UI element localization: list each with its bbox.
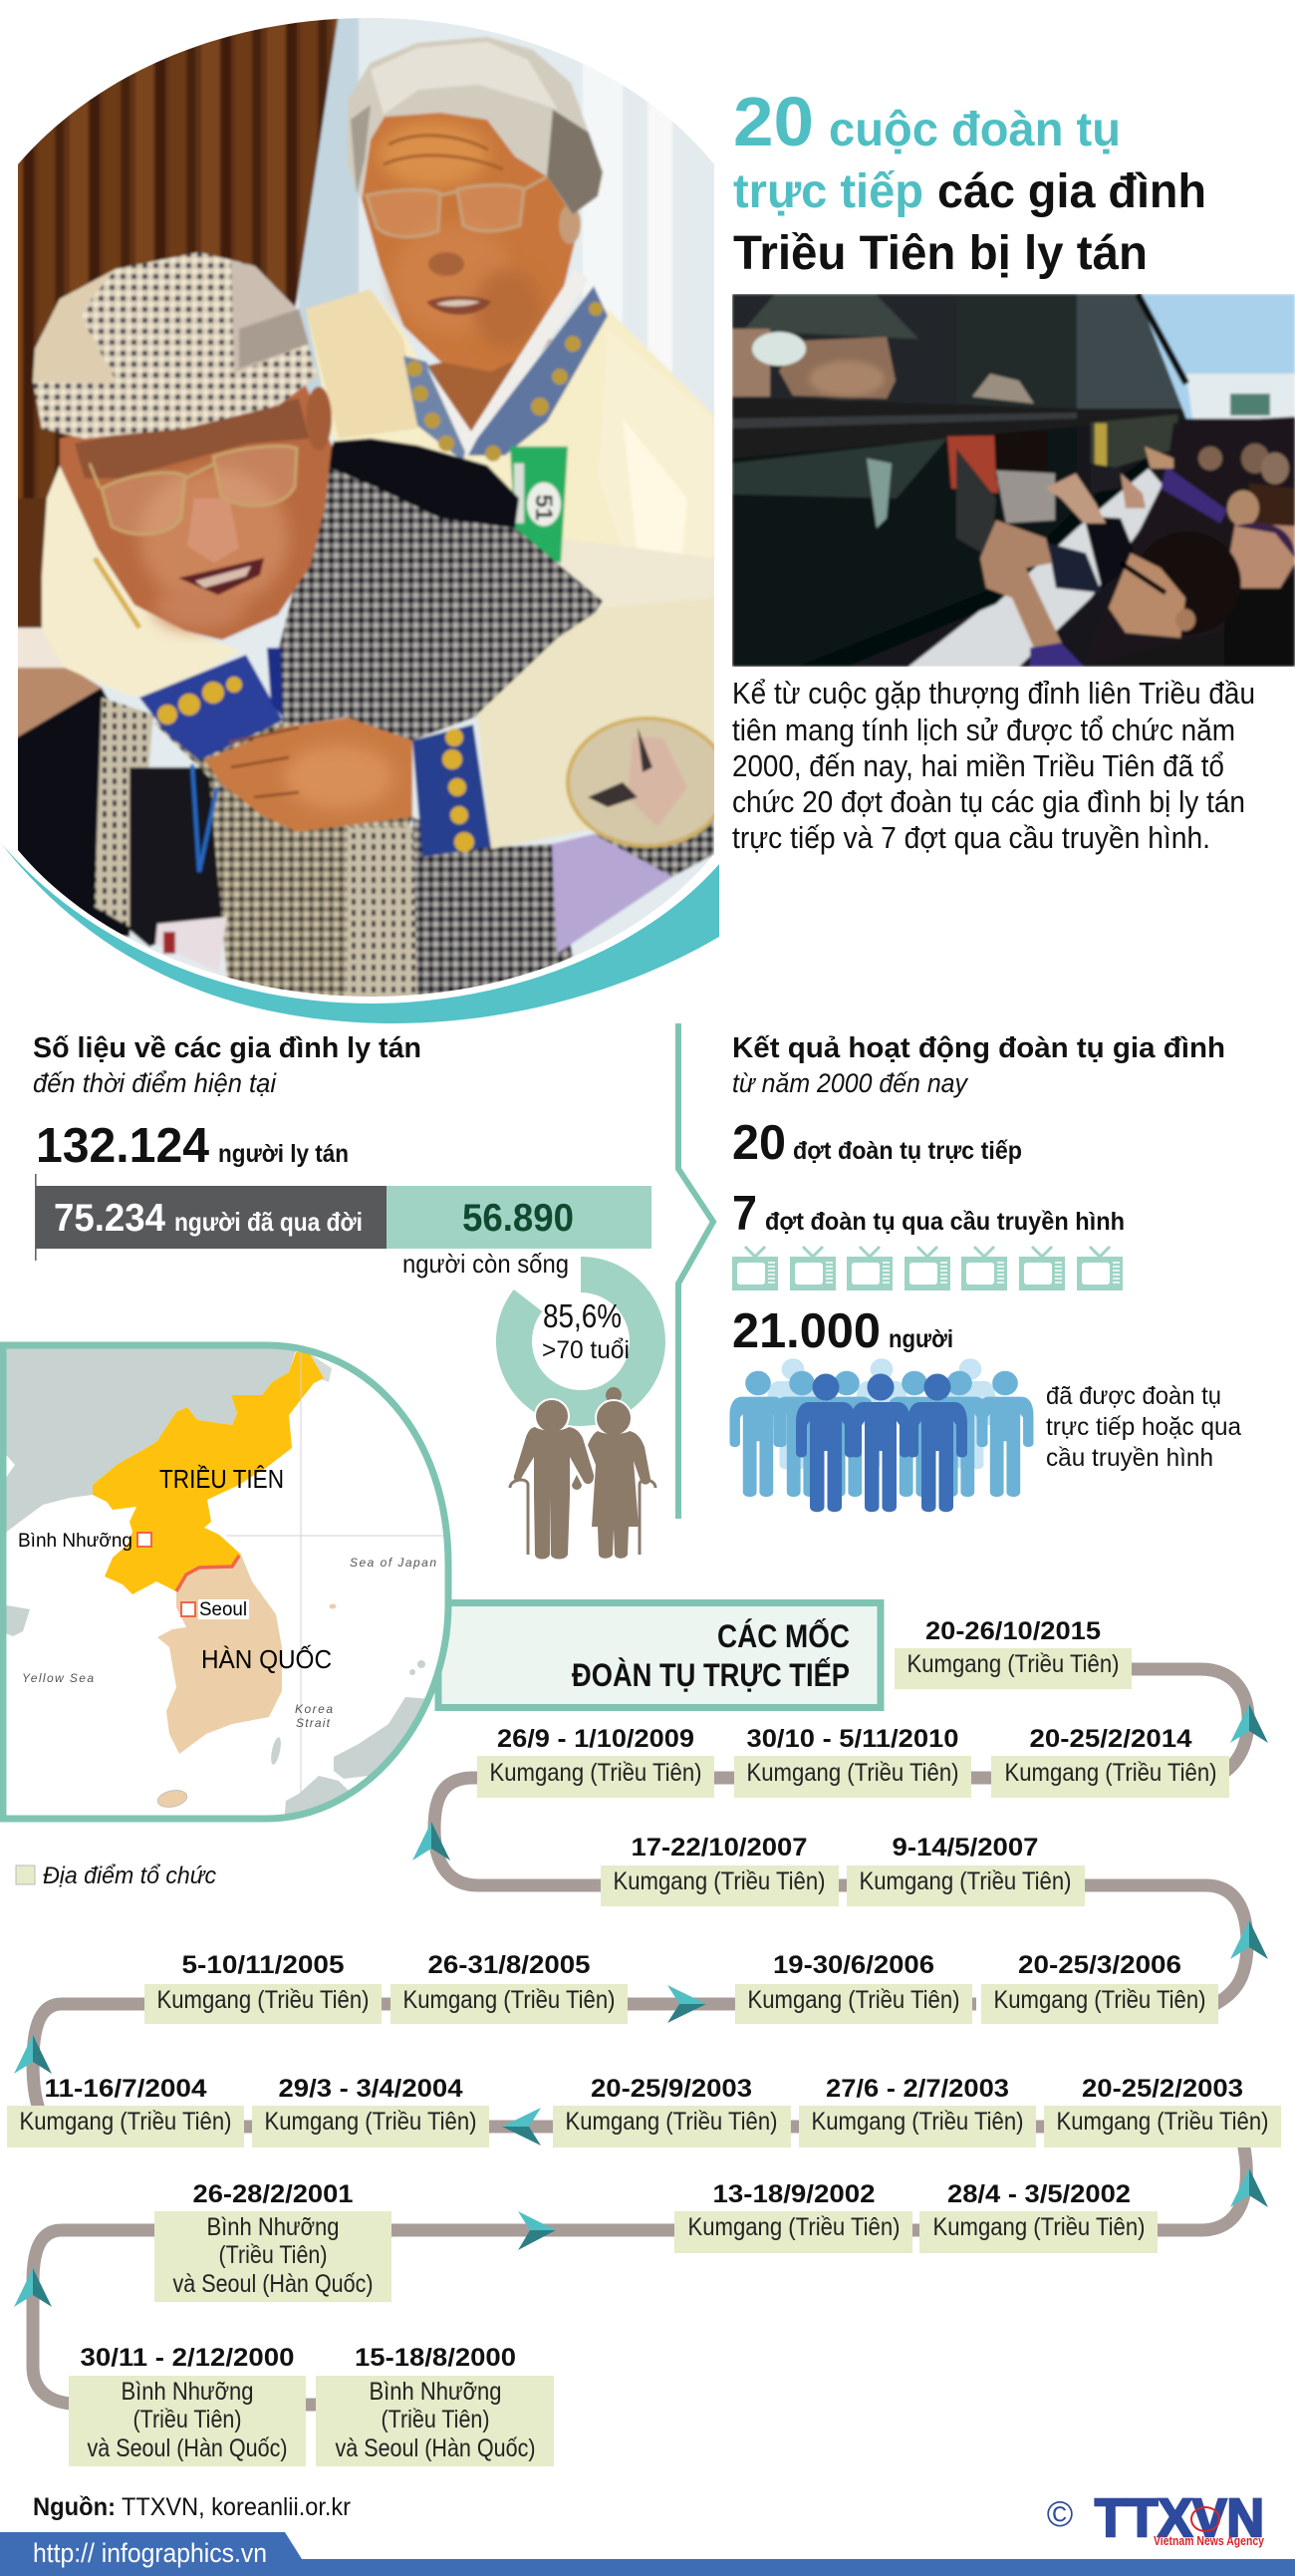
- land: China: [0, 1340, 299, 1535]
- milestone: 30/10 - 5/11/2010: 30/10 - 5/11/2010: [747, 1725, 958, 1753]
- title: các gia đình: [937, 165, 1206, 218]
- main photo: elderly reunited couple: [0, 0, 727, 1006]
- heading: results: Kết quả hoạt động đoàn tụ gia đình: [732, 1032, 1225, 1064]
- cuff: left: [139, 655, 283, 760]
- milestone: 26-31/8/2005: [390, 1951, 628, 2024]
- milestone: 26-31/8/2005: Kumgang (Triều Tiên): [402, 1986, 616, 2014]
- milestone: 9-14/5/2007: Kumgang (Triều Tiên): [859, 1867, 1072, 1895]
- land: Russia: [309, 1353, 332, 1382]
- milestone: 26/9 - 1/10/2009: 26/9 - 1/10/2009: [497, 1725, 694, 1753]
- neck and face: [426, 339, 552, 435]
- total separated: người ly tán: [218, 1140, 349, 1168]
- milestone: 28/4 - 3/5/2002: [919, 2180, 1158, 2253]
- total separated: [36, 1119, 349, 1173]
- map labels: Sea of Japan: [350, 1556, 436, 1570]
- milestone: 5-10/11/2005: Kumgang (Triều Tiên): [157, 1986, 369, 2014]
- bus side: [908, 468, 1166, 667]
- stat: 7 video reunions: [732, 1187, 1125, 1241]
- title: trực tiếp: [733, 165, 923, 218]
- milestone: 30/11 - 2/12/2000: 30/11 - 2/12/2000: [80, 2344, 295, 2372]
- land: Shandong: [0, 1604, 30, 1636]
- milestone: 26/9 - 1/10/2009: [477, 1725, 714, 1798]
- stat: 7 video reunions: đợt đoàn tụ qua cầu truyền hình: [765, 1208, 1125, 1236]
- milestone: 20-25/2/2014: [991, 1725, 1229, 1798]
- map labels: Korea: [295, 1702, 333, 1716]
- crowd caption: cầu truyền hình: [1046, 1444, 1213, 1472]
- logo: TTXVN: ©: [1047, 2493, 1073, 2534]
- milestone: 20-25/2/2003: 20-25/2/2003: [1082, 2075, 1243, 2103]
- milestone: 9-14/5/2007: [847, 1834, 1085, 1906]
- sleeve with embroidery: [477, 598, 714, 849]
- arrow: [412, 1822, 450, 1860]
- milestone: 20-26/10/2015: 20-26/10/2015: [925, 1617, 1101, 1645]
- map labels: HÀN QUỐC: [201, 1644, 332, 1674]
- milestone: 15-18/8/2000: [316, 2344, 554, 2466]
- milestone: 28/4 - 3/5/2002: 28/4 - 3/5/2002: [947, 2180, 1131, 2208]
- intro paragraph: 2000, đến nay, hai miền Triều Tiên đã tổ: [732, 748, 1224, 783]
- arrow: [14, 2268, 52, 2307]
- map labels: Bình Nhưỡng: [18, 1531, 132, 1552]
- milestone: 20-25/3/2006: Kumgang (Triều Tiên): [994, 1986, 1205, 2014]
- milestone: 17-22/10/2007: 17-22/10/2007: [632, 1834, 807, 1861]
- map labels: Seoul: [199, 1599, 247, 1620]
- milestone: 29/3 - 3/4/2004: Kumgang (Triều Tiên): [265, 2108, 476, 2136]
- arrow: [1230, 1704, 1268, 1743]
- milestone: 20-25/2/2003: Kumgang (Triều Tiên): [1056, 2108, 1269, 2136]
- milestone: 19-30/6/2006: [735, 1951, 972, 2024]
- milestone: 20-26/10/2015: [895, 1617, 1132, 1689]
- milestone: 5-10/11/2005: [144, 1951, 382, 2024]
- milestone: 27/6 - 2/7/2003: [799, 2075, 1036, 2147]
- milestone: 20-25/2/2014: 20-25/2/2014: [1030, 1725, 1192, 1753]
- milestone: 26/9 - 1/10/2009: Kumgang (Triều Tiên): [490, 1759, 701, 1787]
- bar: deceased vs living: người đã qua đời: [174, 1207, 363, 1237]
- intro paragraph: tiên mang tính lịch sử được tổ chức năm: [732, 713, 1235, 747]
- milestone: 29/3 - 3/4/2004: [252, 2075, 489, 2147]
- milestone: 26-31/8/2005: 26-31/8/2005: [428, 1951, 591, 1979]
- total separated: 132.124: [36, 1119, 209, 1173]
- bar: deceased vs living: 56.890: [462, 1197, 574, 1240]
- source line: Nguồn:: [33, 2493, 116, 2521]
- milestone: 11-16/7/2004: [7, 2075, 244, 2147]
- stat: 21,000 people: người: [889, 1325, 953, 1353]
- rail: [732, 397, 1184, 458]
- milestone: 30/10 - 5/11/2010: Kumgang (Triều Tiên): [747, 1759, 958, 1787]
- milestone: 15-18/8/2000: Bình Nhưỡng: [369, 2378, 502, 2406]
- donut chart: 85,6% over 70: 85,6%: [543, 1297, 622, 1334]
- milestone: 30/11 - 2/12/2000: (Triều Tiên): [133, 2406, 241, 2433]
- milestone: 20-26/10/2015: Kumgang (Triều Tiên): [906, 1650, 1120, 1678]
- logo: TTXVN: TTXVN: [1095, 2488, 1264, 2548]
- footer bar: http:// infographics.vn: [33, 2538, 267, 2568]
- glasses: man: [90, 446, 297, 534]
- milestone: 20-25/2/2014: Kumgang (Triều Tiên): [1004, 1759, 1217, 1787]
- arrow: [1230, 2168, 1268, 2207]
- heading: results: [732, 1032, 1225, 1098]
- icons: seven televisions: [732, 1247, 1123, 1290]
- milestone: 9-14/5/2007: 9-14/5/2007: [893, 1834, 1038, 1861]
- hair: [347, 36, 590, 198]
- donut chart: 85,6% over 70: >70 tuổi: [542, 1336, 630, 1364]
- sleeves: [1048, 543, 1102, 593]
- stat: 21,000 people: 21.000: [732, 1304, 881, 1358]
- hands: [980, 520, 1063, 653]
- collar: [403, 356, 468, 461]
- milestone: 28/4 - 3/5/2002: Kumgang (Triều Tiên): [932, 2213, 1146, 2241]
- map labels: Strait: [296, 1716, 331, 1730]
- timeline title box: ĐOÀN TỤ TRỰC TIẾP: [572, 1657, 850, 1693]
- crowd caption: [1046, 1382, 1241, 1472]
- title: 20: [733, 83, 814, 160]
- milestone: 20-25/3/2006: [981, 1951, 1218, 2024]
- milestone: 20-25/9/2003: 20-25/9/2003: [591, 2075, 752, 2103]
- source line: TTXVN, koreanlii.or.kr: [122, 2493, 351, 2521]
- man's face: [60, 386, 332, 640]
- icon: elderly couple: [510, 1387, 655, 1559]
- jacket: [278, 458, 603, 740]
- map labels: Yellow Sea: [22, 1671, 94, 1685]
- scarf: [42, 465, 241, 698]
- intro paragraph: [732, 676, 1255, 855]
- milestone: 29/3 - 3/4/2004: 29/3 - 3/4/2004: [279, 2075, 463, 2103]
- heading: results: từ năm 2000 đến nay: [732, 1068, 968, 1098]
- milestone: 11-16/7/2004: 11-16/7/2004: [44, 2075, 207, 2103]
- footer bar: [0, 2532, 1295, 2576]
- chevron divider: [678, 1023, 713, 1519]
- land: North Korea: [93, 1352, 324, 1594]
- bar: deceased vs living: người còn sống: [402, 1249, 569, 1279]
- dark collar shape: [325, 438, 519, 528]
- milestone: 30/11 - 2/12/2000: Bình Nhưỡng: [122, 2378, 253, 2406]
- milestone: 5-10/11/2005: 5-10/11/2005: [181, 1951, 345, 1979]
- milestone: 15-18/8/2000: 15-18/8/2000: [355, 2344, 516, 2372]
- arrow: [502, 2108, 541, 2146]
- map labels: [18, 1464, 436, 1730]
- glasses: woman: [367, 175, 550, 237]
- timeline path: [7, 1669, 1281, 2405]
- milestone: 30/11 - 2/12/2000: [69, 2344, 306, 2466]
- intro paragraph: chức 20 đợt đoàn tụ các gia đình bị ly tán: [732, 784, 1245, 819]
- bar: deceased vs living: [35, 1174, 651, 1279]
- milestone: 20-25/9/2003: Kumgang (Triều Tiên): [566, 2108, 777, 2136]
- stat: 20 direct reunions: [732, 1116, 1022, 1170]
- crowd caption: đã được đoàn tụ: [1046, 1382, 1221, 1410]
- stat: 21,000 people: [732, 1304, 953, 1358]
- lower window: [732, 427, 1077, 667]
- heading: statistics: Số liệu về các gia đình ly tán: [33, 1032, 421, 1064]
- milestone: 26-28/2/2001: và Seoul (Hàn Quốc): [173, 2270, 373, 2298]
- legend: Địa điểm tổ chức: [43, 1862, 216, 1889]
- hanbok: [308, 297, 714, 546]
- milestone: 11-16/7/2004: Kumgang (Triều Tiên): [20, 2108, 231, 2136]
- stat: 20 direct reunions: đợt đoàn tụ trực tiếp: [793, 1137, 1022, 1165]
- donut chart: 85,6% over 70: [514, 1275, 648, 1408]
- milestone: 20-25/2/2003: [1044, 2075, 1281, 2147]
- land: South Korea: [157, 1555, 282, 1754]
- milestone: 20-25/3/2006: 20-25/3/2006: [1018, 1951, 1181, 1979]
- milestone: 27/6 - 2/7/2003: 27/6 - 2/7/2003: [826, 2075, 1009, 2103]
- intro paragraph: Kể từ cuộc gặp thượng đỉnh liên Triều đầu: [732, 676, 1255, 711]
- crowd caption: trực tiếp hoặc qua: [1046, 1413, 1241, 1441]
- panel: reunion results: [729, 1032, 1241, 1512]
- woman faces: [1249, 483, 1295, 528]
- timeline title box: [438, 1602, 881, 1708]
- windows at far end: [1091, 415, 1177, 470]
- main photo: elderly reunited couple: 51: [530, 494, 557, 521]
- title: Triều Tiên bị ly tán: [733, 227, 1148, 280]
- milestone: 17-22/10/2007: Kumgang (Triều Tiên): [614, 1867, 825, 1895]
- heading: statistics: [33, 1032, 421, 1098]
- border line: [176, 1556, 239, 1591]
- milestone: 13-18/9/2002: 13-18/9/2002: [713, 2180, 875, 2208]
- intro paragraph: trực tiếp và 7 đợt qua cầu truyền hình.: [732, 820, 1210, 855]
- arrow: [518, 2211, 556, 2250]
- purple lining and lower sleeve: [552, 834, 672, 954]
- panel: separated-family statistics: [33, 1032, 655, 1559]
- arrow: [667, 1985, 706, 2023]
- milestone: 17-22/10/2007: [601, 1834, 839, 1906]
- man with glasses: [1134, 531, 1241, 635]
- milestone: 13-18/9/2002: [674, 2180, 912, 2253]
- hand: [204, 717, 412, 832]
- name badge: [510, 446, 568, 563]
- milestone: 15-18/8/2000: (Triều Tiên): [381, 2406, 490, 2433]
- milestone: 30/11 - 2/12/2000: và Seoul (Hàn Quốc): [88, 2434, 287, 2462]
- cuff: right: [412, 724, 491, 857]
- milestone: 13-18/9/2002: Kumgang (Triều Tiên): [687, 2213, 901, 2241]
- milestone: 19-30/6/2006: Kumgang (Triều Tiên): [747, 1986, 960, 2014]
- title: [733, 83, 1206, 280]
- logo: TTXVN: Vietnam News Agency: [1154, 2533, 1265, 2548]
- lanyard and ID badge: [192, 764, 217, 872]
- bar: deceased vs living: 75.234: [54, 1197, 165, 1240]
- milestone: 15-18/8/2000: và Seoul (Hàn Quốc): [335, 2434, 536, 2462]
- milestone: 30/10 - 5/11/2010: [734, 1725, 971, 1798]
- photo: families at the bus window: [732, 294, 1295, 667]
- icon: crowd of people: [729, 1358, 1034, 1512]
- milestone: 26-28/2/2001: (Triều Tiên): [219, 2241, 327, 2269]
- map labels: TRIỀU TIÊN: [159, 1464, 284, 1494]
- teal crescent under photo: [0, 842, 719, 1023]
- land: Japan: [334, 1697, 443, 1779]
- stat: 20 direct reunions: 20: [732, 1116, 786, 1170]
- milestone: 27/6 - 2/7/2003: Kumgang (Triều Tiên): [811, 2108, 1024, 2136]
- crowd: [1081, 417, 1295, 667]
- map of the Korean peninsula: [0, 1340, 448, 1824]
- milestone: 20-25/9/2003: [553, 2075, 791, 2147]
- stat: 7 video reunions: 7: [732, 1187, 757, 1241]
- arrow: [1230, 1920, 1268, 1959]
- milestone: 19-30/6/2006: 19-30/6/2006: [773, 1951, 934, 1979]
- milestone: 26-28/2/2001: [154, 2180, 391, 2302]
- grid lines: [226, 1345, 445, 1819]
- timeline title box: CÁC MỐC: [717, 1618, 850, 1654]
- title: cuộc đoàn tụ: [829, 104, 1121, 156]
- arrow: [14, 2035, 52, 2074]
- cap: [33, 252, 318, 438]
- milestone: 26-28/2/2001: 26-28/2/2001: [193, 2180, 354, 2208]
- milestone: 26-28/2/2001: Bình Nhưỡng: [207, 2213, 339, 2241]
- source line: [33, 2493, 351, 2521]
- heading: statistics: đến thời điểm hiện tại: [33, 1068, 277, 1098]
